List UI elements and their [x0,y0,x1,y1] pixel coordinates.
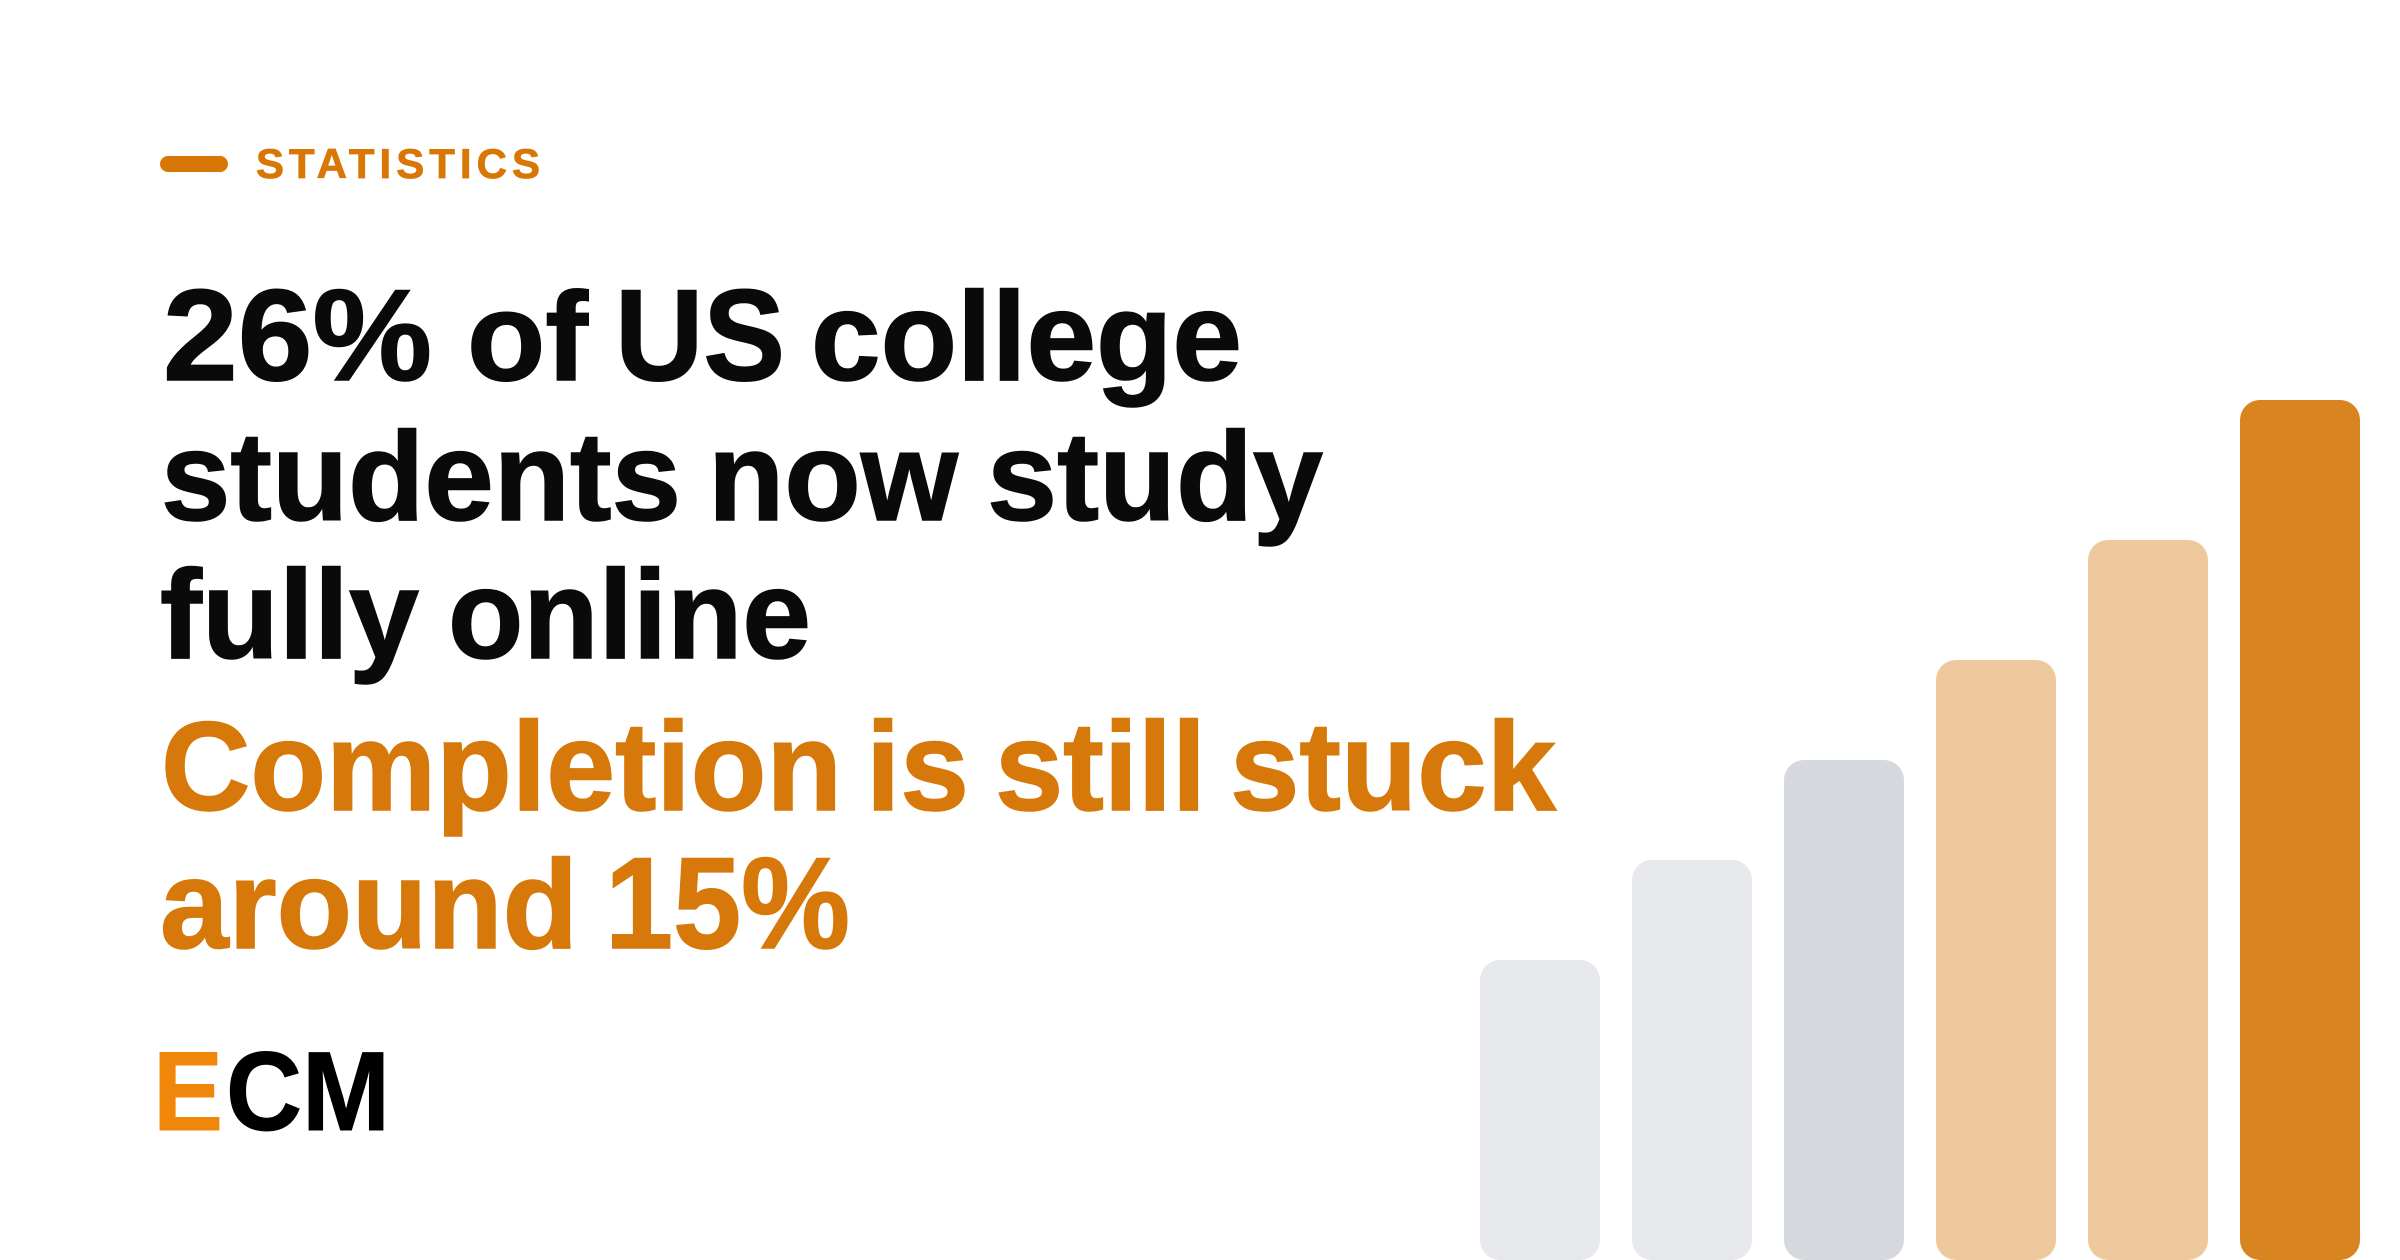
logo: ECM: C [226,1029,302,1154]
headline: black statement: US [615,262,785,408]
bar 2 [1632,860,1752,1260]
eyebrow text: STATISTICS [256,140,540,187]
headline: orange highlight: is [866,696,969,837]
headline: black statement: fully [160,544,419,685]
headline: black statement: of [467,266,589,407]
headline: orange highlight: Completion [161,696,842,837]
bar chart: rising bars [1480,400,2360,1260]
logo: ECM [153,1029,390,1154]
headline: orange highlight: still [995,696,1206,837]
bar 5 [2088,540,2208,1260]
headline: orange highlight [160,696,1557,976]
headline: orange highlight: 15% [605,830,850,976]
bar 3 [1784,760,1904,1260]
headline: black statement: study [987,406,1323,547]
headline: black statement: now [708,406,959,547]
headline: black statement: students [161,406,681,547]
headline: orange highlight: around [160,834,578,975]
bar 1 [1480,960,1600,1260]
eyebrow: statistics label [160,140,540,187]
logo: ECM: E [153,1029,223,1154]
bar 6 [2240,400,2360,1260]
headline: black statement [160,262,1323,685]
logo: ECM: M [302,1029,390,1154]
headline: black statement: college [811,266,1242,407]
headline: black statement: online [448,544,811,685]
headline: black statement: 26% [163,262,432,408]
headline: orange highlight: stuck [1230,696,1557,837]
bar 4 [1936,660,2056,1260]
eyebrow accent pill [160,156,228,172]
